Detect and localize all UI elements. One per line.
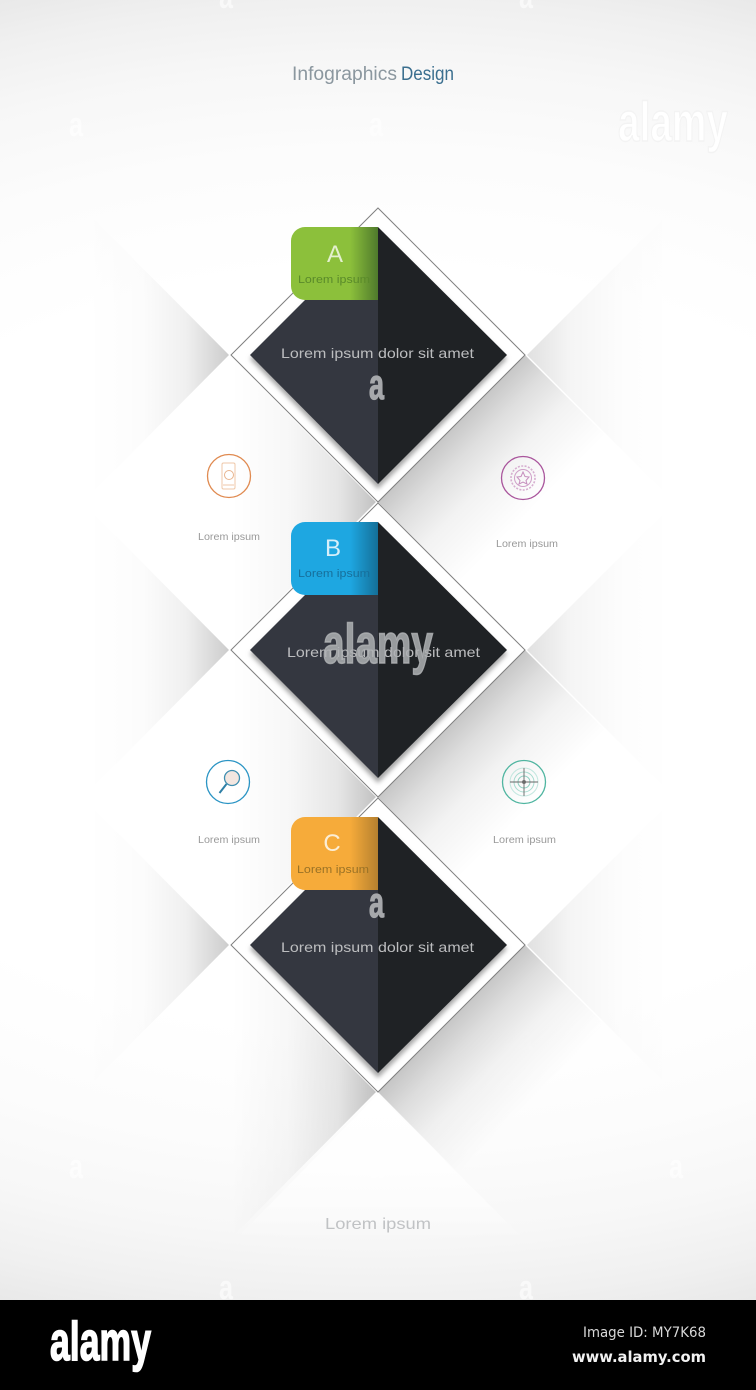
icon: magnifier	[206, 760, 250, 804]
label: wheel gear: Lorem ipsum	[496, 539, 558, 550]
tab C: C	[323, 830, 341, 857]
tab C: Lorem ipsum	[297, 864, 369, 876]
tab A: A	[327, 241, 343, 268]
label: phone search: Lorem ipsum	[198, 532, 260, 543]
central alamy watermark: alamy	[323, 612, 433, 675]
footer image id: Image ID: MY7K68	[583, 1325, 706, 1341]
label: magnifier: Lorem ipsum	[198, 835, 260, 846]
faint background watermarks: a	[669, 1148, 684, 1186]
tab B: Lorem ipsum	[298, 568, 370, 580]
panel B: dark diamond	[231, 503, 525, 797]
faint background watermarks: a	[219, 1269, 234, 1307]
footer url: www.alamy.com	[572, 1348, 706, 1366]
panel C text: Lorem ipsum dolor sit amet	[281, 939, 474, 955]
tab B	[291, 522, 378, 595]
panel C: dark diamond	[231, 798, 525, 1092]
faint background watermarks: a	[519, 1020, 534, 1058]
title	[292, 64, 454, 85]
watermark letters on diamonds	[369, 361, 385, 927]
faint background watermarks: a	[369, 1148, 384, 1186]
tab A	[291, 227, 378, 300]
tab C	[291, 817, 378, 890]
panel A: dark diamond	[231, 208, 525, 502]
panel A text: Lorem ipsum dolor sit amet	[281, 345, 474, 361]
tab A: Lorem ipsum	[298, 274, 370, 286]
faint background watermarks: a	[519, 1269, 534, 1307]
watermark letters on diamonds: a	[369, 361, 385, 409]
faint background watermarks: a	[369, 106, 384, 144]
icon: target	[502, 760, 546, 804]
bottom caption: Lorem ipsum	[325, 1216, 431, 1233]
faint background watermarks: a	[69, 106, 84, 144]
title: Design	[401, 64, 454, 85]
faint background watermarks	[69, 0, 684, 1307]
title: Infographics	[292, 64, 397, 85]
footer logo: alamy	[50, 1310, 151, 1372]
folded paper shading	[85, 210, 672, 1240]
panel B text: Lorem ipsum dolor sit amet	[287, 644, 480, 660]
icon: wheel gear	[502, 456, 544, 500]
footer bar	[0, 1300, 756, 1390]
faint background watermarks: a	[619, 887, 634, 925]
watermark letters on diamonds: a	[369, 879, 385, 927]
tab B: B	[325, 535, 341, 562]
faint background watermarks: a	[69, 1148, 84, 1186]
icon: phone search	[208, 454, 250, 498]
label: target: Lorem ipsum	[493, 835, 556, 846]
